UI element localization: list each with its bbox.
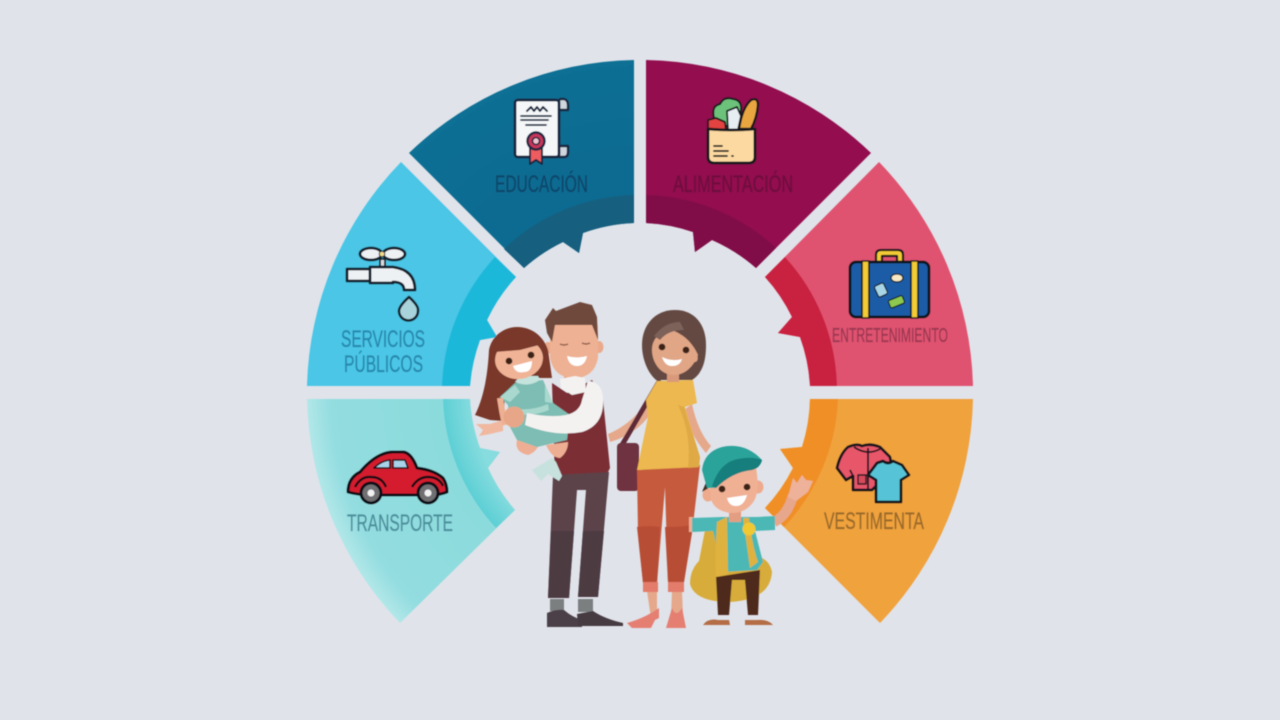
panel: educación: [409, 60, 634, 268]
icon: red car: [348, 452, 447, 503]
label: educación: EDUCACIÓN: [495, 171, 588, 198]
icon: grocery bag: [708, 98, 758, 163]
panel: vestimenta: [765, 399, 973, 623]
label: servicios: SERVICIOS: [341, 326, 425, 353]
label: transporte: TRANSPORTE: [347, 510, 453, 537]
panel: transporte: [307, 399, 515, 623]
figure: mother: [608, 310, 711, 628]
panel: entretenimiento: [765, 162, 973, 386]
panel: servicios públicos: [307, 162, 516, 386]
icon: suitcase: [850, 250, 929, 318]
figure: boy: [689, 446, 813, 625]
illustration: family: [475, 302, 813, 628]
icon: water tap: [347, 248, 418, 320]
panel: alimentación: [646, 60, 871, 268]
label: vestimenta: VESTIMENTA: [824, 508, 924, 535]
figure: father: [544, 302, 623, 627]
label: públicos: PÚBLICOS: [344, 351, 423, 378]
figure: father's arm holding the girl: [504, 381, 603, 433]
icon: diploma: [515, 99, 568, 164]
label: entretenimiento: ENTRETENIMIENTO: [832, 325, 948, 347]
label: alimentación: ALIMENTACIÓN: [673, 171, 793, 198]
figure: girl: [475, 327, 570, 481]
icon: clothes: [837, 445, 909, 502]
